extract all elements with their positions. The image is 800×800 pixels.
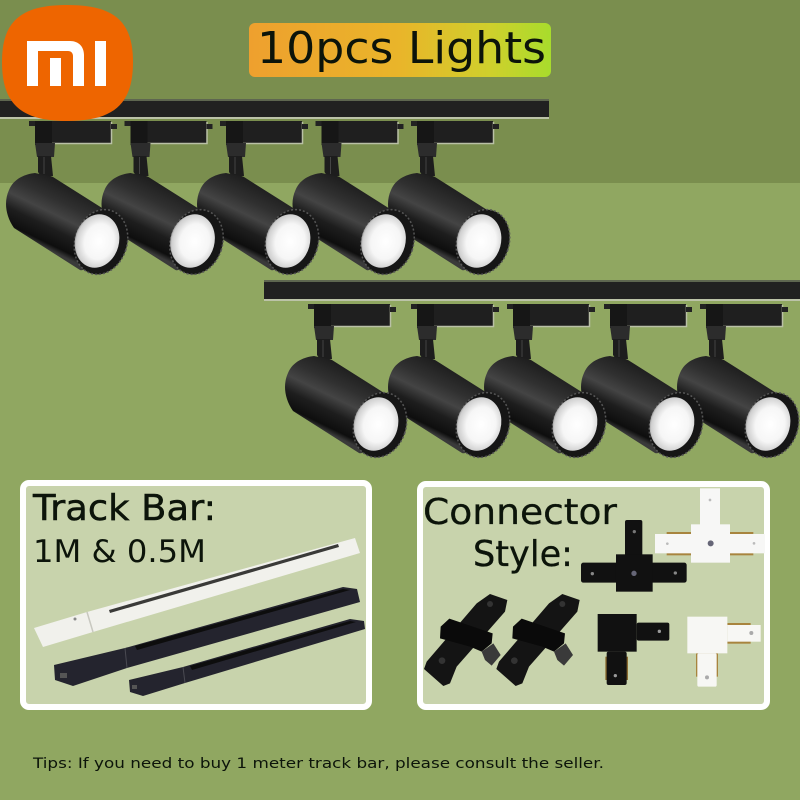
- wall background: [0, 0, 800, 183]
- floor background: [0, 183, 800, 800]
- icon: black L connector: [598, 614, 669, 685]
- panel: connector style: [420, 484, 767, 707]
- icon: black straight connector 2: [496, 594, 580, 686]
- brand logo: Mi: [2, 5, 133, 121]
- white track bar: [34, 538, 360, 647]
- icon: white L connector: [687, 617, 761, 687]
- lower track light rail: [264, 280, 800, 301]
- connector icons: [424, 488, 765, 687]
- panel: track bar: [23, 483, 369, 707]
- title badge: 10pcs Lights: [257, 23, 546, 74]
- subheading: lengths: 1M & 0.5M: [33, 534, 206, 570]
- short black track bar: [129, 619, 365, 696]
- tips note: Tips: If you need to buy 1 meter track bar, please consult the seller.: [32, 756, 604, 772]
- icon: black T connector: [581, 520, 687, 592]
- upper track light rail: [0, 99, 549, 119]
- icon: black straight connector 1: [424, 594, 507, 686]
- long black track bar: [54, 587, 360, 686]
- icon: white T connector: [655, 488, 765, 563]
- lower row of five spotlights: [285, 304, 800, 464]
- heading: style: Style:: [473, 534, 573, 575]
- upper row of five spotlights: [6, 121, 518, 281]
- heading: track bar: Track Bar:: [32, 488, 216, 529]
- heading: connector: Connector: [423, 492, 617, 533]
